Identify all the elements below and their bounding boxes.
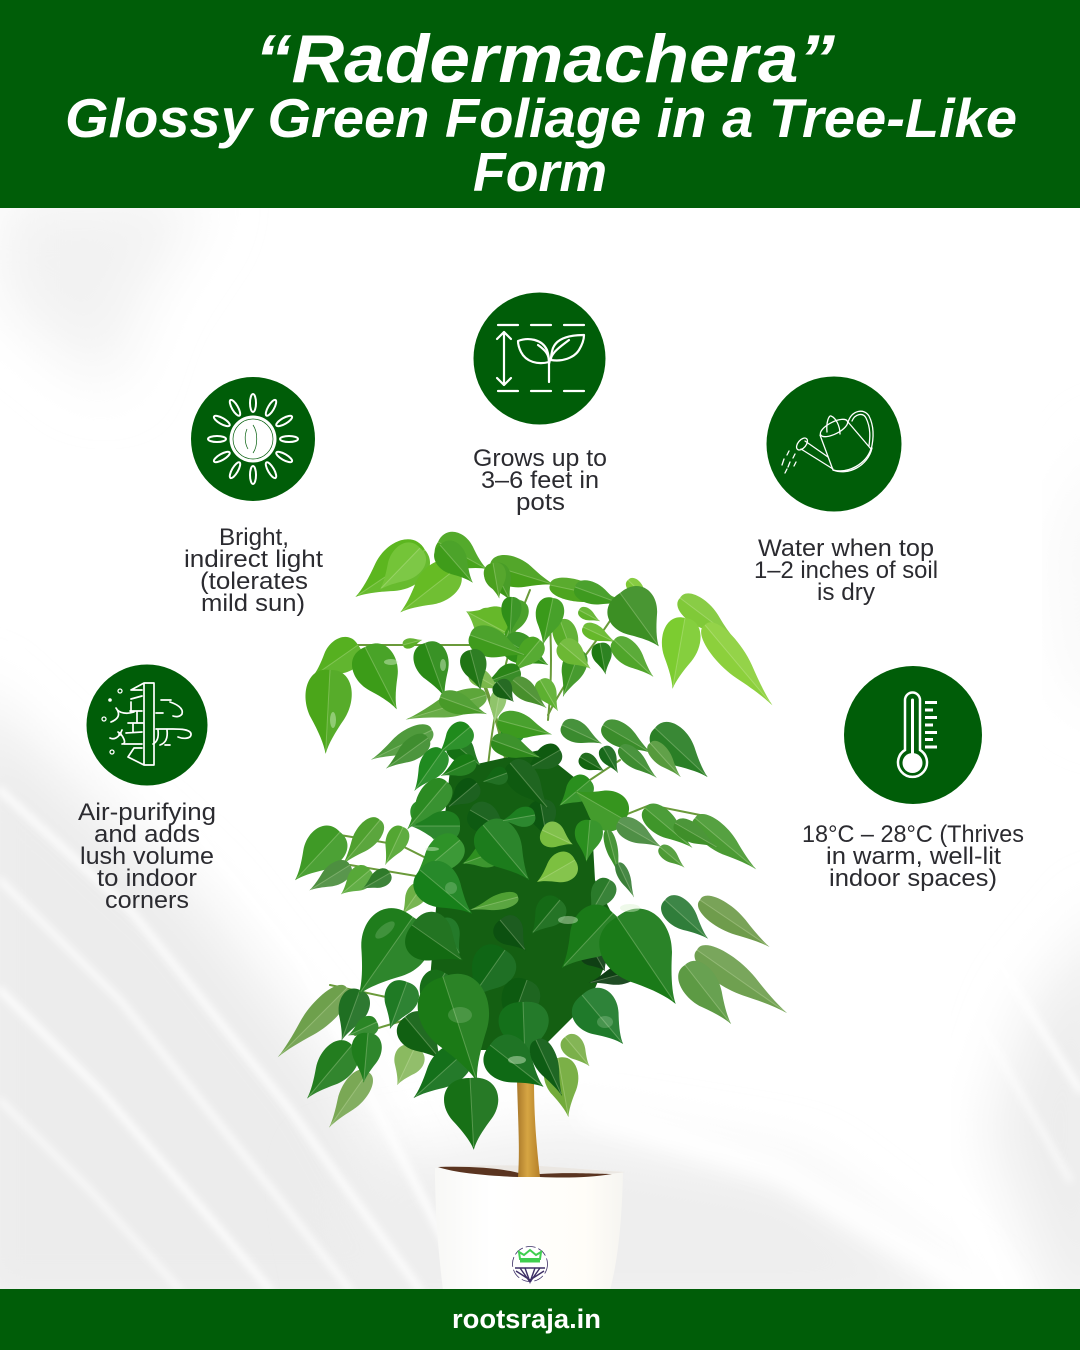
dense foliage mass — [430, 750, 620, 1050]
caption: temperature: 18°C – 28°C (Thrives — [802, 821, 1024, 848]
icon: plant height — [474, 292, 606, 424]
caption: temperature: in warm, well-lit — [826, 843, 1001, 870]
plant — [268, 526, 796, 1290]
caption: height: Grows up to — [473, 445, 607, 472]
caption: air purifying: to indoor — [97, 865, 197, 892]
feature: air purifying — [78, 664, 216, 914]
caption: height: 3–6 feet in — [481, 467, 599, 494]
feature: temperature — [802, 666, 1024, 892]
title: “Radermachera” — [255, 21, 835, 97]
title: Glossy Green Foliage in a Tree-Like — [65, 87, 1017, 149]
caption: light: indirect light — [184, 546, 323, 573]
caption: air purifying — [78, 799, 216, 914]
feature: light — [184, 377, 323, 617]
title — [65, 21, 1017, 203]
upper crown leaves — [302, 526, 783, 755]
icon: watering can — [766, 376, 902, 512]
header band — [0, 0, 1080, 208]
icon: air filter — [86, 664, 208, 786]
caption: air purifying: and adds — [94, 821, 200, 848]
caption: light: (tolerates — [200, 568, 308, 595]
caption: watering: is dry — [817, 579, 875, 606]
pot — [435, 1165, 625, 1290]
title: Form — [473, 141, 607, 203]
caption: watering: 1–2 inches of soil — [754, 557, 938, 584]
feature: height — [473, 292, 607, 516]
icon: thermometer — [844, 666, 982, 804]
caption: watering: Water when top — [758, 535, 934, 562]
caption: height: pots — [516, 489, 565, 516]
footer band — [0, 1289, 1080, 1350]
caption: watering — [754, 535, 938, 606]
lower tier leaves — [268, 889, 796, 1151]
trunk — [517, 1080, 540, 1177]
footer band: rootsraja.in — [452, 1304, 601, 1334]
caption: temperature — [802, 821, 1024, 892]
caption: air purifying: lush volume — [80, 843, 214, 870]
pot logo — [511, 1245, 549, 1283]
icon: sun — [191, 377, 315, 501]
caption: light: Bright, — [219, 524, 289, 551]
caption: height — [473, 445, 607, 516]
caption: light — [184, 524, 323, 617]
feature: watering — [754, 376, 938, 606]
middle tier leaves — [280, 707, 765, 961]
gloss highlights — [330, 659, 640, 1064]
stems — [330, 590, 700, 1090]
caption: light: mild sun) — [201, 590, 305, 617]
caption: air purifying: Air-purifying — [78, 799, 216, 826]
caption: temperature: indoor spaces) — [829, 865, 997, 892]
caption: air purifying: corners — [105, 887, 189, 914]
